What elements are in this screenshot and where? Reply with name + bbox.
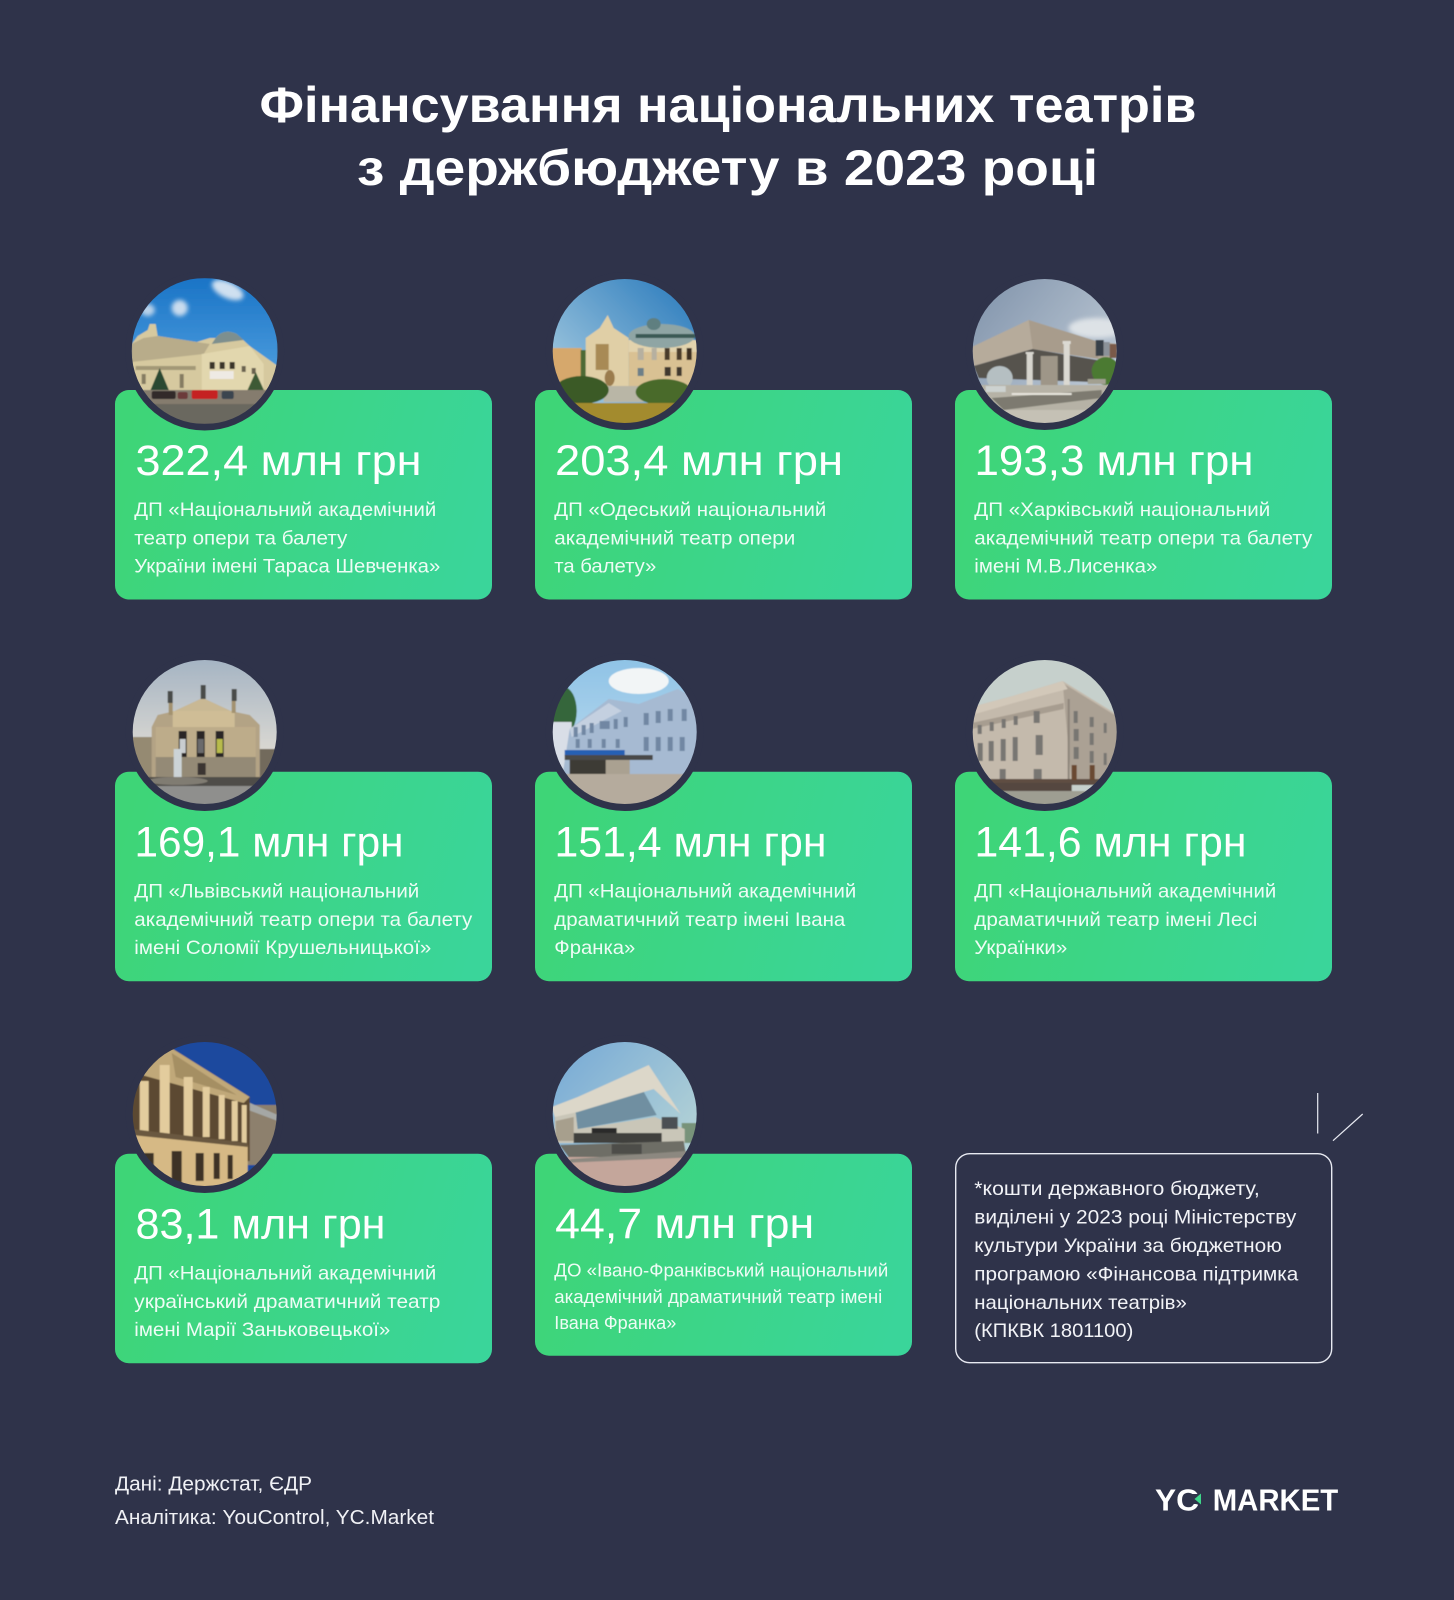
- panel: Ivano-Frankivsk theatre: [535, 1035, 912, 1356]
- amount: 322,4 млн грн: [136, 437, 422, 485]
- theatre name: [974, 499, 1313, 578]
- theatre name: ДП «Харківський національний: [974, 499, 1270, 521]
- theatre name: театр опери та балету: [134, 528, 348, 550]
- callout: budget note: виділені у 2023 році Міністерству: [974, 1206, 1297, 1228]
- theatre name: український драматичний театр: [134, 1291, 440, 1313]
- callout: budget note: (КПКВК 1801100): [974, 1320, 1133, 1342]
- theatre name: Франка»: [554, 937, 635, 959]
- accent strokes: [1318, 1093, 1363, 1141]
- icon: green triangle: [1194, 1494, 1201, 1504]
- theatre name: [554, 881, 856, 959]
- theatre name: імені Марії Заньковецької»: [134, 1319, 390, 1341]
- theatre name: академічний драматичний театр імені: [554, 1286, 882, 1307]
- amount: 169,1 млн грн: [134, 819, 404, 867]
- theatre name: [554, 499, 826, 578]
- photo: Zankovetska theatre: [132, 1041, 280, 1187]
- theatre name: драматичний театр імені Івана: [554, 909, 845, 931]
- photo: Lviv opera house: [132, 659, 278, 805]
- callout: budget note: [956, 1154, 1332, 1363]
- panel: Kharkiv opera: [955, 272, 1332, 600]
- theatre name: академічний театр опери та балету: [134, 909, 473, 931]
- theatre name: Івана Франка»: [554, 1312, 676, 1333]
- photo: Kyiv opera house: [132, 276, 278, 424]
- callout: budget note: програмою «Фінансова підтримка: [974, 1264, 1298, 1286]
- theatre name: академічний театр опери та балету: [974, 528, 1313, 550]
- theatre name: та балету»: [554, 556, 656, 578]
- photo: Ivano-Frankivsk theatre: [552, 1041, 698, 1187]
- theatre name: ДП «Національний академічний: [134, 1263, 436, 1285]
- panel: Zankovetska theatre: [115, 1035, 492, 1363]
- source note: Аналітика: YouControl, YC.Market: [115, 1507, 434, 1529]
- source note: [115, 1474, 434, 1529]
- photo: Ivan Franko theatre: [551, 659, 698, 805]
- theatre name: [974, 881, 1276, 959]
- panel: Kyiv opera: [115, 272, 492, 600]
- title: Фінансування національних театрів: [260, 77, 1196, 133]
- logo: YC Market: YC: [1155, 1482, 1199, 1518]
- theatre name: Українки»: [974, 937, 1067, 959]
- callout: budget note: культури України за бюджетною: [974, 1235, 1282, 1257]
- theatre name: ДП «Національний академічний: [974, 881, 1276, 903]
- amount: 44,7 млн грн: [555, 1200, 814, 1248]
- amount: 203,4 млн грн: [555, 437, 843, 485]
- theatre name: імені М.В.Лисенка»: [974, 556, 1157, 578]
- source note: Дані: Держстат, ЄДР: [115, 1474, 312, 1496]
- panel: Lesya Ukrainka theatre: [955, 653, 1332, 981]
- theatre name: академічний театр опери: [554, 528, 795, 550]
- theatre name: драматичний театр імені Лесі: [974, 909, 1257, 931]
- callout: budget note: *кошти державного бюджету,: [974, 1178, 1260, 1200]
- amount: 151,4 млн грн: [554, 819, 826, 867]
- theatre name: [134, 1263, 440, 1341]
- photo: Lesya Ukrainka theatre: [972, 659, 1118, 805]
- theatre name: ДП «Національний академічний: [554, 881, 856, 903]
- theatre name: [134, 499, 440, 578]
- theatre name: ДП «Одеський національний: [554, 499, 826, 521]
- logo: YC Market: MARKET: [1213, 1482, 1338, 1518]
- amount: 83,1 млн грн: [136, 1200, 386, 1248]
- photo: Odesa opera house: [552, 278, 699, 424]
- amount: 141,6 млн грн: [974, 819, 1246, 867]
- title: з держбюджету в 2023 році: [357, 140, 1098, 196]
- title: [260, 77, 1196, 196]
- photo: Kharkiv opera house: [972, 278, 1125, 424]
- panel: Lviv opera: [115, 653, 492, 981]
- callout: budget note: національних театрів»: [974, 1292, 1187, 1314]
- amount: 193,3 млн грн: [974, 437, 1254, 485]
- theatre name: ДП «Національний академічний: [134, 499, 436, 521]
- theatre name: України імені Тараса Шевченка»: [134, 556, 440, 578]
- panel: Odesa opera: [535, 272, 912, 600]
- theatre name: ДП «Львівський національний: [134, 881, 419, 903]
- theatre name: [134, 881, 473, 959]
- theatre name: [554, 1260, 888, 1333]
- theatre name: ДО «Івано-Франківський національний: [554, 1260, 888, 1280]
- panel: Ivan Franko theatre: [535, 653, 912, 981]
- logo: YC Market: [1155, 1482, 1338, 1518]
- theatre name: імені Соломії Крушельницької»: [134, 937, 431, 959]
